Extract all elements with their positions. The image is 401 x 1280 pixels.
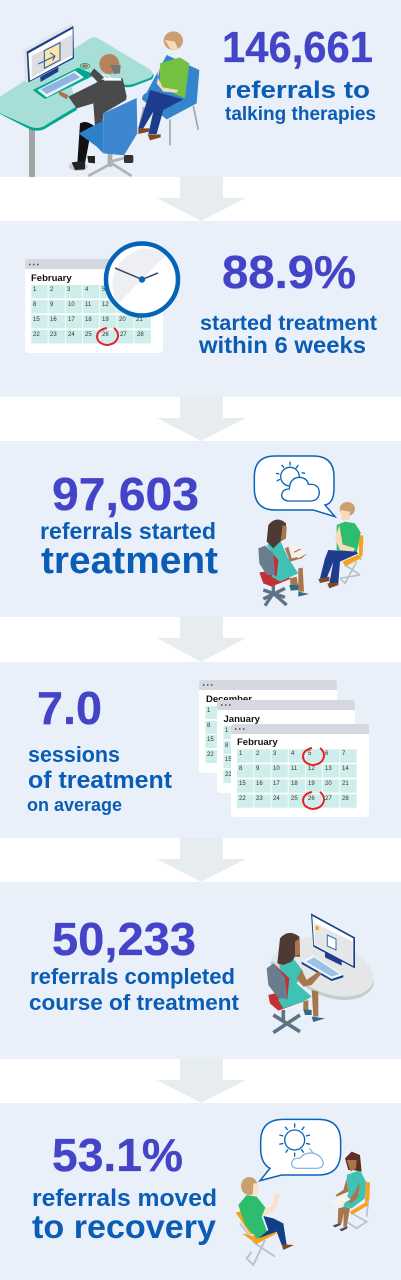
arrow 4 bbox=[157, 838, 246, 882]
calendar: February: 19 bbox=[102, 317, 109, 323]
calendar: February: 23 bbox=[50, 332, 57, 338]
caption: referrals moved bbox=[32, 1185, 217, 1212]
caption emphasis: to recovery bbox=[32, 1208, 217, 1245]
illustration: conversation bbox=[254, 456, 363, 606]
caption: referrals started bbox=[40, 518, 216, 544]
panel: sessions bbox=[0, 662, 401, 838]
calendar: December: 22 bbox=[207, 752, 214, 758]
speech bubble bbox=[260, 1119, 341, 1181]
person: client on folding chair bbox=[236, 1177, 294, 1265]
calendar: February: 9 bbox=[256, 766, 260, 772]
figure: 146,661 bbox=[222, 23, 373, 72]
calendar: February: 9 bbox=[50, 302, 54, 308]
calendar: February: 3 bbox=[67, 287, 71, 293]
figure: 97,603 bbox=[52, 468, 199, 520]
calendar: February: 5 bbox=[308, 751, 312, 757]
calendar: February: 16 bbox=[50, 317, 57, 323]
calendar: February: 2 bbox=[256, 751, 260, 757]
figure: 50,233 bbox=[52, 913, 196, 965]
calendar: December: 8 bbox=[207, 723, 211, 729]
calendar: December: 1 bbox=[207, 708, 211, 714]
calendar: February: 21 bbox=[342, 781, 349, 787]
panel: completed bbox=[0, 882, 401, 1059]
person: clinician bbox=[267, 933, 325, 1033]
calendar: December: December bbox=[206, 694, 252, 705]
caption line 2: within 6 weeks bbox=[198, 332, 366, 358]
calendar: February: 12 bbox=[102, 302, 109, 308]
calendar: February: 11 bbox=[291, 766, 298, 772]
calendar: February: 1 bbox=[239, 751, 243, 757]
calendar: February: 22 bbox=[239, 796, 246, 802]
calendar: January: January bbox=[224, 714, 261, 725]
caption line 2: of treatment bbox=[28, 767, 172, 794]
calendar: February: 25 bbox=[291, 796, 298, 802]
calendar: February: 28 bbox=[342, 796, 349, 802]
caption: referrals to bbox=[225, 77, 370, 104]
calendar: February bbox=[231, 724, 369, 817]
arrow 5 bbox=[157, 1059, 246, 1103]
calendar: February: 23 bbox=[256, 796, 263, 802]
calendar: February: 20 bbox=[119, 317, 126, 323]
calendar: February: 20 bbox=[325, 781, 332, 787]
calendar: February: 5 bbox=[102, 287, 106, 293]
calendar: February: 27 bbox=[325, 796, 332, 802]
calendar: February: 1 bbox=[33, 287, 37, 293]
calendar: February: 24 bbox=[68, 332, 75, 338]
calendar: February: 15 bbox=[33, 317, 40, 323]
calendar: February: 8 bbox=[33, 302, 37, 308]
calendar: January bbox=[217, 700, 355, 793]
calendar: January: 15 bbox=[225, 757, 232, 763]
caption line 2: course of treatment bbox=[29, 990, 240, 1015]
calendar: February: 22 bbox=[33, 332, 40, 338]
figure: 7.0 bbox=[37, 682, 102, 734]
calendar: February: 17 bbox=[273, 781, 280, 787]
person: clinician at desk bbox=[58, 54, 137, 176]
panel: referrals bbox=[0, 0, 401, 177]
person: seated listener bbox=[138, 31, 199, 145]
calendar: February: 27 bbox=[120, 332, 127, 338]
calendar: February: 26 bbox=[102, 332, 109, 338]
calendar: January: 8 bbox=[225, 743, 229, 749]
arrow 1 bbox=[157, 177, 246, 221]
calendar: January: 22 bbox=[225, 772, 232, 778]
calendar: February: 28 bbox=[137, 332, 144, 338]
calendar: February: 4 bbox=[85, 287, 89, 293]
calendar: February: 18 bbox=[291, 781, 298, 787]
caption: started treatment bbox=[200, 312, 377, 335]
icon: clock bbox=[106, 244, 178, 316]
calendar: December bbox=[199, 680, 337, 773]
calendar: February: 14 bbox=[342, 766, 349, 772]
caption: sessions bbox=[28, 742, 120, 767]
calendar: February: 12 bbox=[308, 766, 315, 772]
calendar: February: 11 bbox=[85, 302, 92, 308]
person: client on folding chair bbox=[318, 502, 363, 588]
caption line 2: talking therapies bbox=[225, 104, 376, 125]
caption emphasis: treatment bbox=[41, 540, 218, 582]
calendar: February: 3 bbox=[273, 751, 277, 757]
calendar: February: February bbox=[31, 273, 72, 284]
calendar: February: 18 bbox=[85, 317, 92, 323]
person: clinician on office chair bbox=[258, 520, 309, 606]
figure: 53.1% bbox=[52, 1129, 183, 1181]
figure: 88.9% bbox=[222, 246, 356, 298]
calendar: February: 8 bbox=[239, 766, 243, 772]
calendar: February: 2 bbox=[50, 287, 54, 293]
calendar: February: 6 bbox=[325, 751, 329, 757]
calendar: February: 10 bbox=[273, 766, 280, 772]
arrow 3 bbox=[157, 617, 246, 662]
caption line 3: on average bbox=[27, 795, 122, 815]
illustration: two people at a desk bbox=[0, 23, 199, 177]
panel: recovery bbox=[0, 1103, 401, 1280]
panel: started treatment bbox=[0, 441, 401, 617]
calendar: February: 17 bbox=[68, 317, 75, 323]
calendar: February: 7 bbox=[342, 751, 346, 757]
speech bubble bbox=[254, 456, 335, 517]
calendar: February: 25 bbox=[85, 332, 92, 338]
calendar: February: 10 bbox=[68, 302, 75, 308]
arrow 2 bbox=[157, 397, 246, 441]
calendar: February: 15 bbox=[239, 781, 246, 787]
calendar: February: 4 bbox=[291, 751, 295, 757]
illustration: woman at computer bbox=[267, 913, 374, 1033]
calendar: February bbox=[25, 259, 163, 353]
calendar: February: 24 bbox=[273, 796, 280, 802]
panel: waiting time bbox=[0, 221, 401, 397]
calendar: January: 1 bbox=[225, 728, 229, 734]
calendar: February: 26 bbox=[308, 796, 315, 802]
person: clinician on folding chair bbox=[330, 1152, 370, 1231]
illustration: conversation bbox=[236, 1119, 370, 1265]
calendar: February: February bbox=[237, 737, 278, 748]
calendar: February: 21 bbox=[136, 317, 143, 323]
calendar: February: 13 bbox=[325, 766, 332, 772]
caption: referrals completed bbox=[30, 964, 235, 989]
calendar: February: 19 bbox=[308, 781, 315, 787]
calendar: February: 16 bbox=[256, 781, 263, 787]
calendar: December: 15 bbox=[207, 737, 214, 743]
